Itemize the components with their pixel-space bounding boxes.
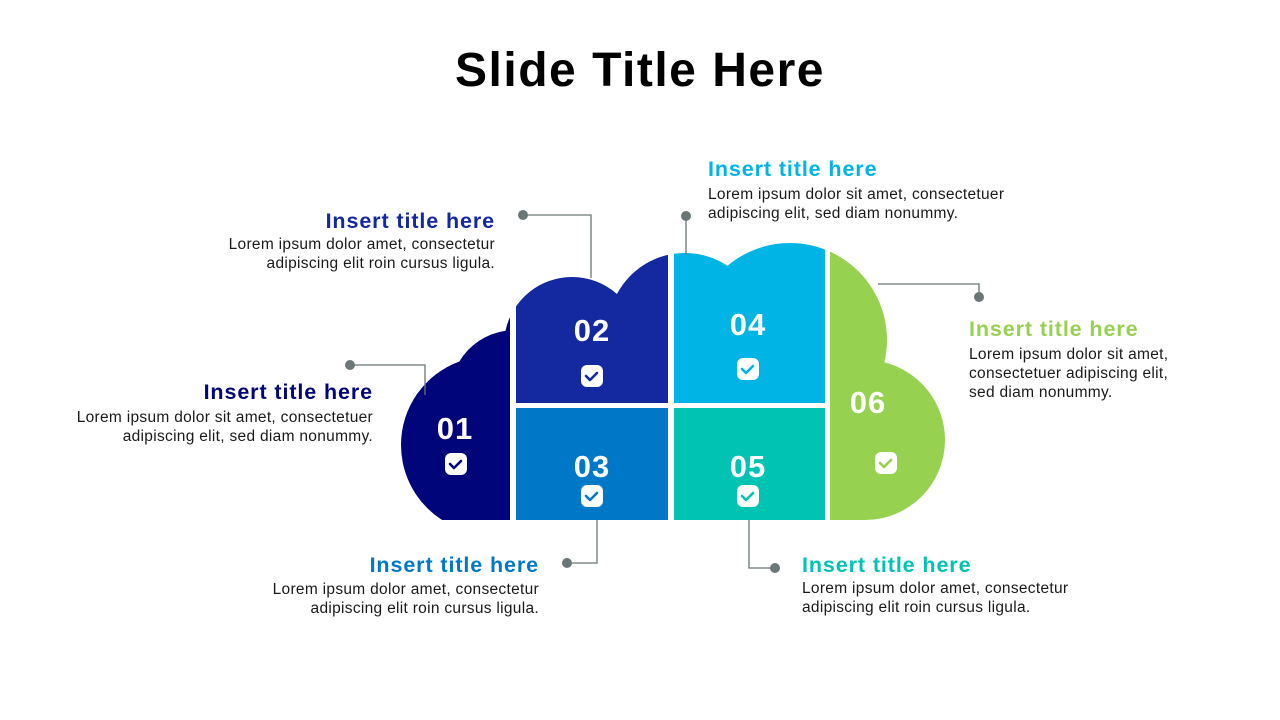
text block 01 [77,380,373,445]
text block 04 [708,157,1004,222]
text block 02 [229,209,495,272]
text block 03 [273,553,539,617]
text block 02: adipiscing elit roin cursus ligula. [267,255,495,272]
text block 01: Lorem ipsum dolor sit amet, consectetuer [77,409,373,426]
text block 04: Lorem ipsum dolor sit amet, consectetuer [708,186,1004,203]
segment 04 [674,243,825,403]
text block 01: Insert title here [204,380,373,404]
connector dots [345,210,984,573]
segment 01 [401,317,510,520]
text block 05 [802,553,1068,616]
numbers: 04 [730,307,766,342]
text block 04: Insert title here [708,157,877,181]
text block 06: Insert title here [969,317,1138,341]
text block 06: sed diam nonummy. [969,384,1113,401]
text block 02: Lorem ipsum dolor amet, consectetur [229,236,495,253]
text block 05: Lorem ipsum dolor amet, consectetur [802,580,1068,597]
cloud [401,243,945,520]
text block 03: Insert title here [370,553,539,577]
text block 04: adipiscing elit, sed diam nonummy. [708,205,958,222]
text block 06: Lorem ipsum dolor sit amet, [969,346,1168,363]
text block 05: Insert title here [802,553,971,577]
segment 02 [516,254,668,403]
numbers: 01 [437,411,473,446]
check icons [445,358,897,507]
text block 03: adipiscing elit roin cursus ligula. [311,600,539,617]
segment 03 [516,408,668,520]
text block 06 [969,317,1168,401]
numbers: 06 [850,385,886,420]
segment 05 [674,408,825,520]
numbers: 03 [574,449,610,484]
text block 05: adipiscing elit roin cursus ligula. [802,599,1030,616]
text block 03: Lorem ipsum dolor amet, consectetur [273,581,539,598]
text block 01: adipiscing elit, sed diam nonummy. [123,428,373,445]
numbers [437,307,886,484]
numbers: 05 [730,449,766,484]
text block 02: Insert title here [326,209,495,233]
title: Slide Title Here [455,44,825,97]
numbers: 02 [574,313,610,348]
segment 06 [830,252,945,520]
connectors [350,215,979,568]
text block 06: consectetuer adipiscing elit, [969,365,1168,382]
